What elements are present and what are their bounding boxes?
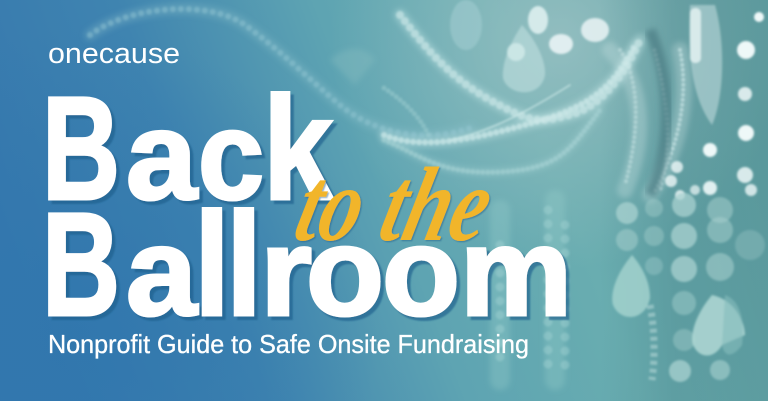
heading: Back: a (126, 87, 198, 226)
heading: Back: B (42, 67, 120, 231)
heading: Back: c (198, 87, 264, 226)
heading: Ballroom (42, 183, 572, 347)
chandelier white sparkles (665, 12, 764, 200)
logo: onecause: onecause (48, 38, 180, 70)
heading: Ballroom: m (460, 203, 572, 342)
heading: Back: k (263, 67, 333, 231)
heading: Ballroom: l (194, 183, 230, 347)
chandelier top crystal drops (450, 0, 722, 125)
chandelier soft strand bodies (90, 9, 684, 380)
heading: Ballroom: l (226, 183, 262, 347)
heading: Ballroom: o (382, 203, 460, 342)
subtitle: Nonprofit Guide to Safe Onsite Fundraising (48, 329, 529, 359)
chandelier lower crystals (612, 193, 765, 382)
heading: Ballroom: a (126, 203, 198, 342)
script: to the: to the (285, 146, 504, 264)
heading: Back (42, 67, 333, 231)
heading: Ballroom: r (260, 203, 312, 342)
chandelier dark arm (650, 30, 666, 195)
heading: Ballroom: o (306, 203, 384, 342)
heading: Ballroom: B (42, 183, 120, 347)
chandelier bead strands (90, 9, 683, 375)
